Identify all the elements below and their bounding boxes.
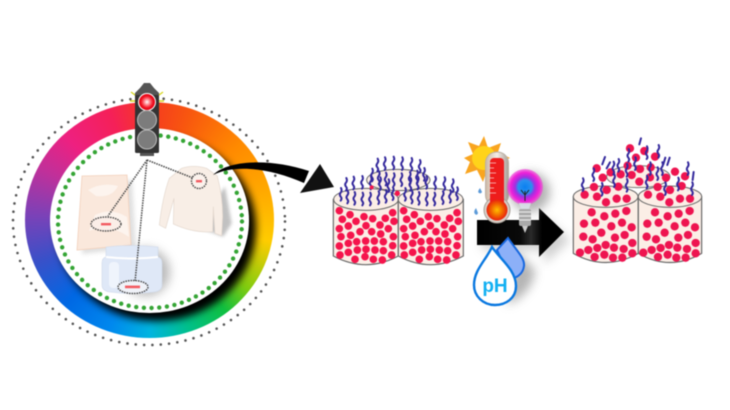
released capsules bbox=[573, 138, 702, 262]
icon: pH droplets bbox=[474, 238, 535, 305]
front left capsule bbox=[333, 176, 398, 265]
icon: water droplets bbox=[474, 188, 482, 215]
grey dotted outer ellipse bbox=[13, 98, 285, 345]
icon: light bulb bbox=[507, 169, 550, 233]
sensor spot on jar bbox=[118, 280, 148, 294]
back droplet bbox=[497, 238, 524, 278]
left capsule bbox=[573, 186, 638, 262]
colour wheel ring bbox=[25, 102, 274, 338]
icon: thermometer bbox=[484, 152, 510, 223]
intact capsules with ligands bbox=[333, 157, 463, 265]
big black arrow with shadow bbox=[477, 208, 570, 264]
green dotted inner ellipse bbox=[58, 135, 242, 308]
sensor spot on bag bbox=[91, 217, 121, 231]
back capsule bbox=[607, 166, 670, 188]
red beads released bbox=[576, 144, 700, 262]
sensor spot on shirt bbox=[192, 174, 206, 188]
product: packaging bag bbox=[77, 175, 136, 254]
purple ligands released bbox=[582, 138, 694, 196]
pH label: pH bbox=[482, 276, 508, 297]
front droplet bbox=[474, 247, 516, 305]
back capsules bbox=[367, 157, 430, 191]
front right capsule bbox=[398, 176, 463, 265]
traffic light bbox=[130, 83, 164, 156]
dotted connector lines bbox=[108, 160, 193, 282]
right capsule bbox=[638, 186, 702, 262]
product: long sleeve shirt bbox=[159, 166, 232, 237]
product: jar bbox=[102, 246, 170, 296]
curved black arrow bbox=[213, 162, 334, 193]
icon: sun bbox=[464, 136, 510, 182]
